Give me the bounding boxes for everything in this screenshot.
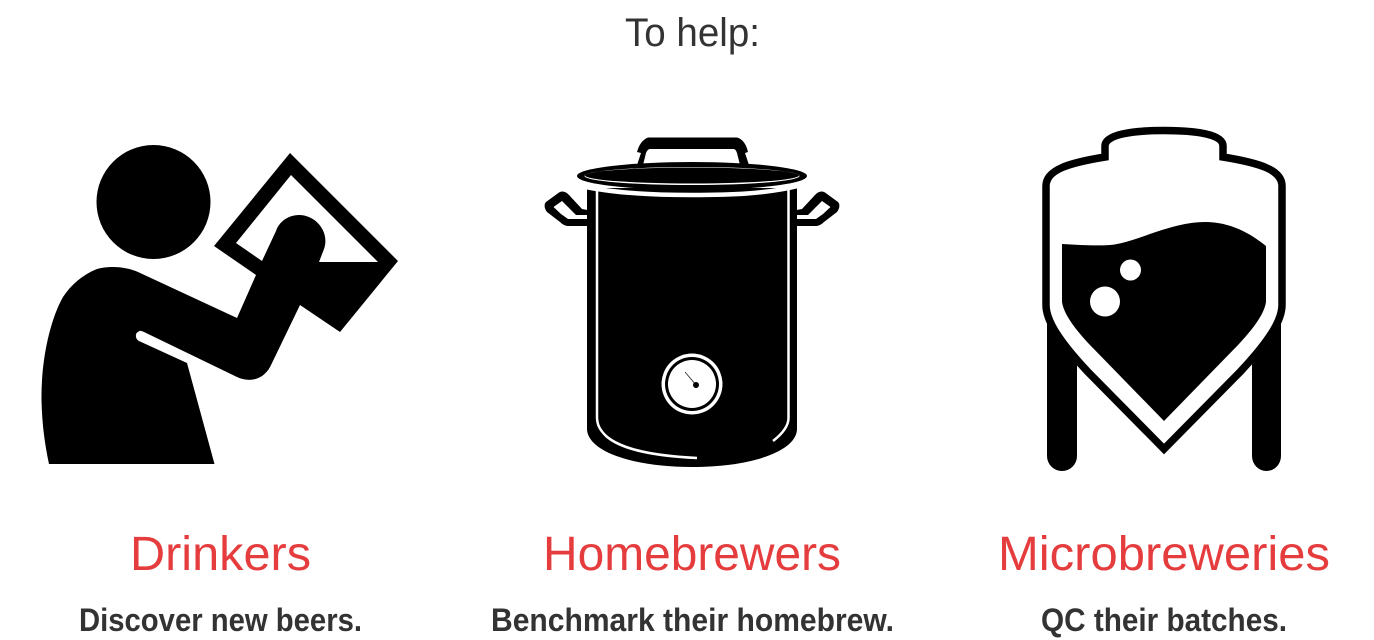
temperature gauge	[662, 354, 722, 414]
heading: Homebrewers: Homebrewers	[543, 528, 841, 581]
title: To help:	[625, 11, 760, 55]
icon: brew kettle	[545, 138, 839, 467]
liquid	[1062, 222, 1266, 421]
heading: Microbreweries: Microbreweries	[998, 528, 1330, 581]
icon: conical fermenter	[1046, 130, 1282, 471]
bubbles	[1120, 260, 1141, 280]
kettle body	[587, 188, 797, 467]
legs	[1047, 310, 1077, 471]
lid	[577, 162, 807, 190]
heading: Drinkers: Drinkers	[130, 528, 311, 581]
right handle	[794, 191, 839, 226]
left handle	[545, 191, 590, 226]
text: drinkers caption: Discover new beers.	[79, 602, 362, 638]
tank outline	[1046, 130, 1282, 449]
lid handle	[637, 138, 749, 165]
text: homebrewers caption: Benchmark their homebrew.	[491, 602, 894, 638]
icon: person drinking beer	[41, 145, 398, 464]
white highlights	[597, 190, 697, 458]
text: microbreweries caption: QC their batches.	[1041, 602, 1287, 638]
